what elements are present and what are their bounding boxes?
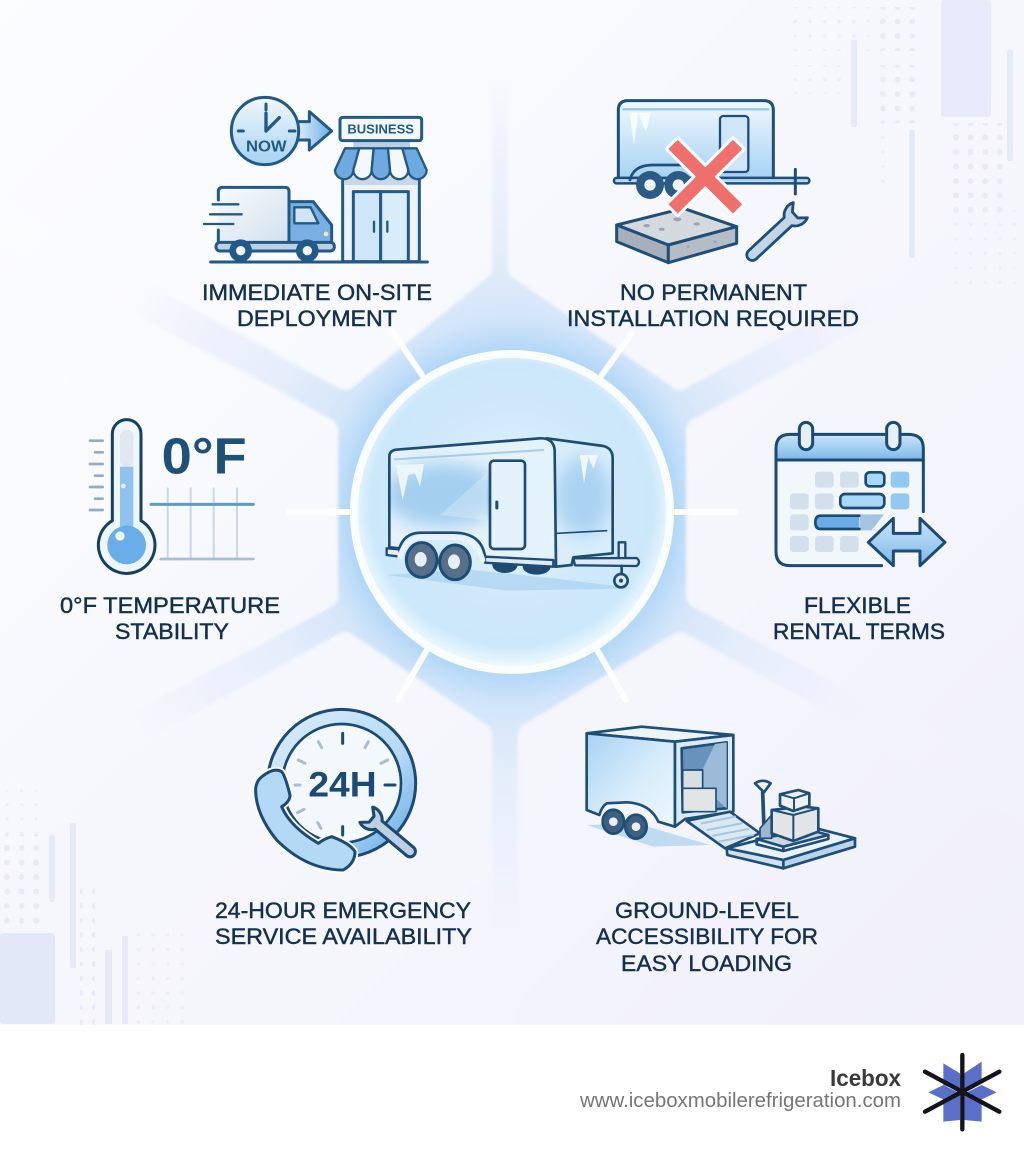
white spokes bbox=[289, 331, 735, 700]
panel: ground-level accessibility bbox=[587, 727, 855, 976]
label: SERVICE AVAILABILITY bbox=[215, 924, 472, 949]
icon: calendar with double arrow bbox=[776, 422, 945, 566]
central glow bbox=[287, 287, 737, 737]
footer band bbox=[0, 1025, 1024, 1154]
panel: 24-hour emergency service bbox=[215, 709, 472, 949]
icon: 24H clock phone and wrench: 24H bbox=[308, 766, 377, 805]
icon: 24H clock phone and wrench bbox=[256, 709, 421, 870]
label: NO PERMANENT bbox=[620, 280, 807, 305]
label: 24-HOUR EMERGENCY bbox=[215, 898, 471, 923]
icon: trailer with ramp and pallet jack bbox=[587, 727, 855, 868]
label: DEPLOYMENT bbox=[237, 306, 397, 331]
icon: clock truck and storefront: BUSINESS bbox=[347, 122, 414, 136]
brand name: Icebox bbox=[830, 1065, 901, 1091]
label: EASY LOADING bbox=[621, 951, 792, 976]
decoration: top-right dots and bars bbox=[790, 0, 1024, 290]
label: RENTAL TERMS bbox=[773, 619, 945, 644]
icon: frozen trailer bbox=[383, 438, 639, 591]
icon: thermometer and 0°F chart bbox=[90, 420, 253, 573]
website url: www.iceboxmobilerefrigeration.com bbox=[579, 1090, 901, 1112]
decoration: bottom-left dots and bars bbox=[0, 790, 192, 1025]
central circle with refrigerated trailer bbox=[354, 354, 670, 670]
label: STABILITY bbox=[115, 619, 229, 644]
label: GROUND-LEVEL bbox=[615, 898, 799, 923]
icon: clock truck and storefront bbox=[204, 97, 427, 262]
panel: immediate on-site deployment bbox=[202, 97, 432, 331]
icon: icebox snowflake logo bbox=[925, 1055, 999, 1129]
label: IMMEDIATE ON-SITE bbox=[202, 280, 432, 305]
panel: temperature stability bbox=[60, 420, 280, 644]
label: ACCESSIBILITY FOR bbox=[596, 924, 818, 949]
icon: thermometer and 0°F chart: 0°F bbox=[162, 427, 247, 484]
label: 0°F TEMPERATURE bbox=[60, 593, 280, 618]
label: FLEXIBLE bbox=[804, 593, 911, 618]
label: INSTALLATION REQUIRED bbox=[567, 306, 859, 331]
panel: flexible rental terms bbox=[773, 422, 945, 644]
icon: clock truck and storefront: NOW bbox=[246, 139, 287, 156]
panel: no permanent installation bbox=[567, 101, 859, 331]
icon: trailer crossed over concrete slab with wrench bbox=[617, 101, 808, 267]
